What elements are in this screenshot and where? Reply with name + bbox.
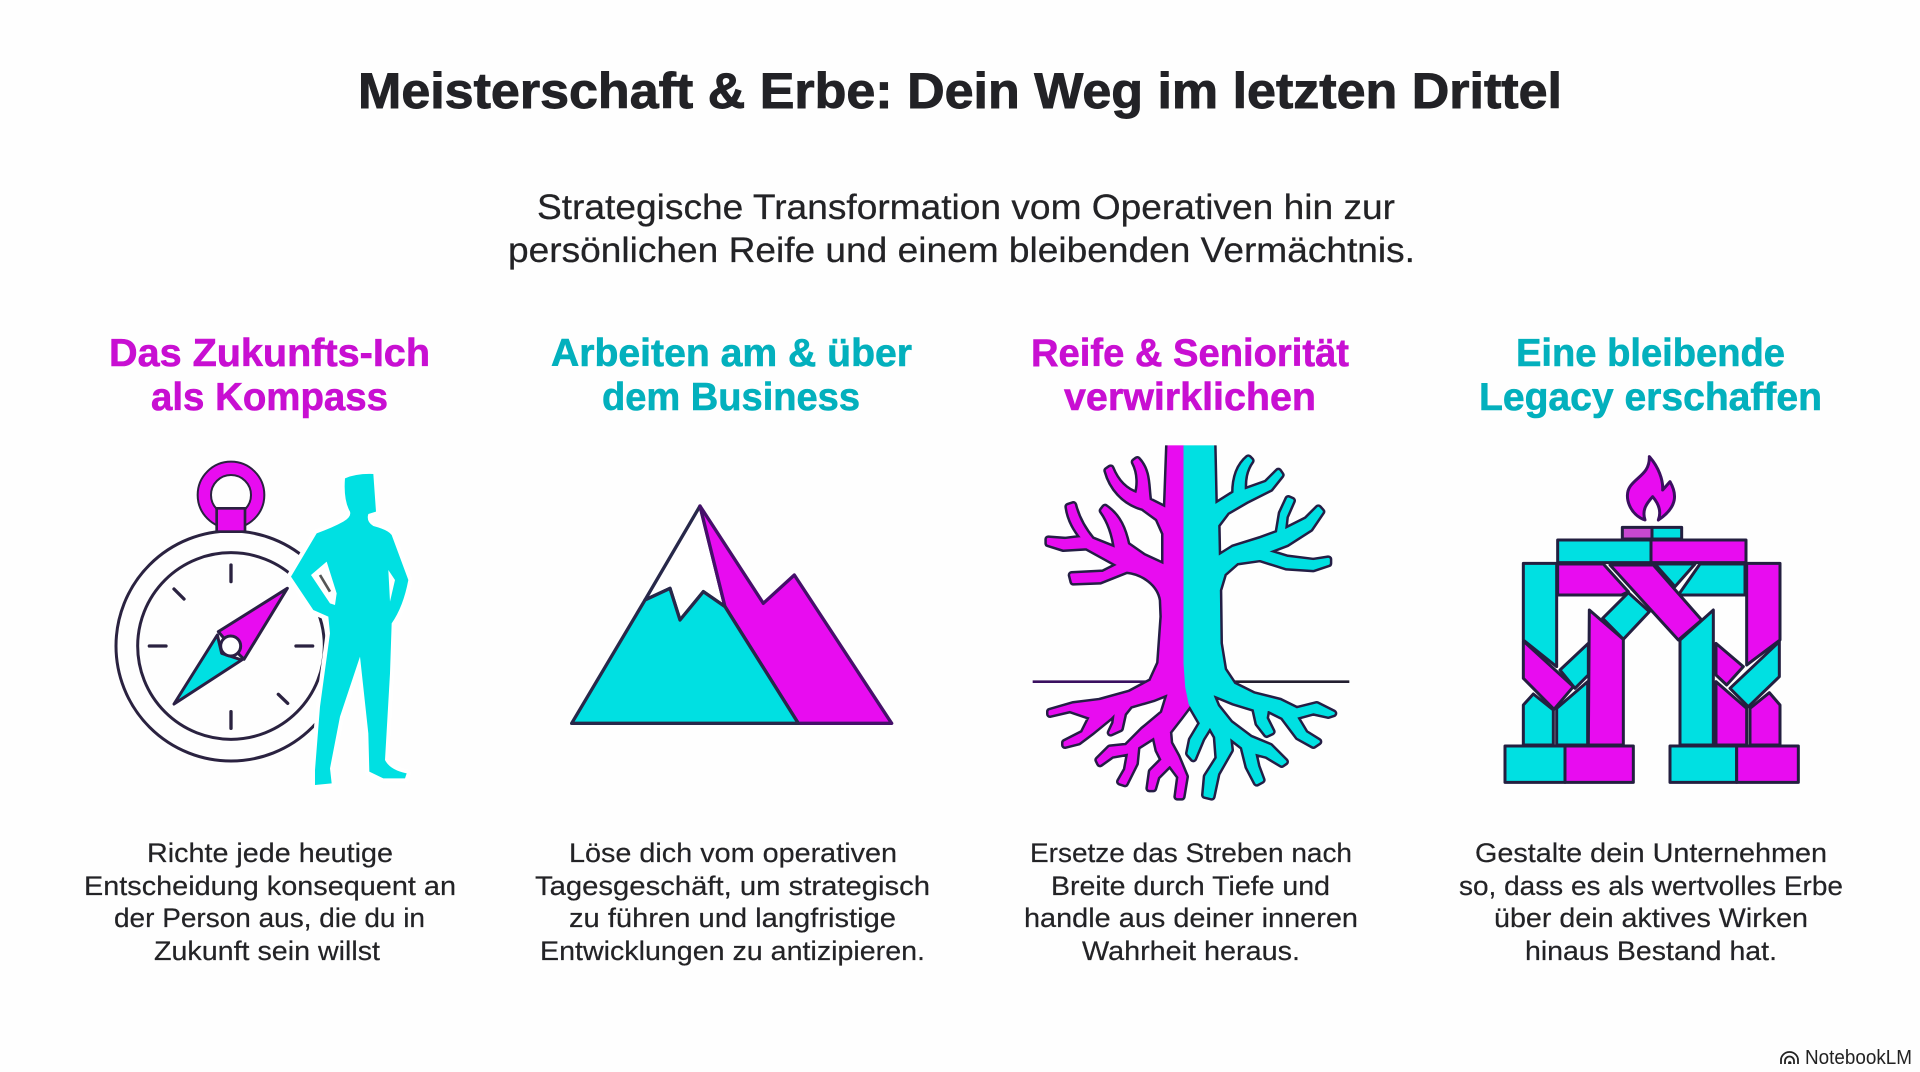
panel: Das Zukunfts-Ich als Kompass	[84, 332, 456, 966]
watermark: NotebookLM: NotebookLM	[1805, 1047, 1912, 1069]
description	[84, 838, 456, 966]
heading: Arbeiten am & über dem Business	[551, 332, 912, 419]
heading: Arbeiten am & über dem Business: Arbeiten am & über	[551, 332, 912, 375]
heading: Das Zukunfts-Ich als Kompass	[109, 332, 430, 419]
description: zu führen und langfristige	[569, 903, 896, 933]
compass needle	[174, 588, 287, 704]
description: Entwicklungen zu antizipieren.	[540, 936, 925, 966]
heading: Reife & Seniorität verwirklichen	[1031, 332, 1349, 419]
person silhouette	[291, 474, 408, 785]
description: Gestalte dein Unternehmen	[1475, 838, 1827, 868]
description: Wahrheit heraus.	[1082, 936, 1300, 966]
heading: Reife & Seniorität verwirklichen: Reife & Seniorität	[1031, 332, 1349, 375]
description: Breite durch Tiefe und	[1051, 871, 1330, 901]
icon: tree with roots	[1033, 438, 1349, 797]
description: Richte jede heutige	[147, 838, 393, 868]
description	[1024, 838, 1358, 966]
description: der Person aus, die du in	[114, 903, 425, 933]
description: hinaus Bestand hat.	[1525, 936, 1777, 966]
description: so, dass es als wertvolles Erbe	[1459, 871, 1843, 901]
description	[535, 838, 930, 966]
subtitle: Strategische Transformation vom Operativen hin zur	[537, 188, 1395, 227]
description: handle aus deiner inneren	[1024, 903, 1358, 933]
compass ring and neck	[204, 468, 258, 532]
magenta peak	[700, 506, 892, 723]
heading: Eine bleibende Legacy erschaffen: Legacy erschaffen	[1479, 376, 1822, 419]
snow cap	[645, 506, 725, 620]
icon: compass and standing person	[116, 468, 408, 785]
heading: Reife & Seniorität verwirklichen: verwirklichen	[1064, 376, 1316, 419]
ground line right	[1230, 678, 1349, 686]
title: Meisterschaft & Erbe: Dein Weg im letzten Drittel	[358, 63, 1562, 119]
heading: Das Zukunfts-Ich als Kompass: Das Zukunfts-Ich	[109, 332, 430, 375]
description	[1459, 838, 1843, 966]
compass body	[116, 531, 346, 761]
heading: Das Zukunfts-Ich als Kompass: als Kompass	[151, 376, 388, 419]
heading: Eine bleibende Legacy erschaffen	[1479, 332, 1822, 419]
panel: Eine bleibende Legacy erschaffen	[1459, 332, 1843, 966]
tree outline	[1048, 446, 1333, 797]
description: Löse dich vom operativen	[569, 838, 897, 868]
arch blocks	[1505, 527, 1798, 782]
ground line	[1033, 678, 1153, 686]
description: Tagesgeschäft, um strategisch	[535, 871, 930, 901]
cyan peak	[572, 588, 798, 723]
panel: Reife & Seniorität verwirklichen	[1024, 332, 1358, 966]
flame	[1627, 457, 1675, 520]
heading: Arbeiten am & über dem Business: dem Business	[602, 376, 860, 419]
description: über dein aktives Wirken	[1494, 903, 1808, 933]
description: Zukunft sein willst	[154, 936, 381, 966]
panel: Arbeiten am & über dem Business	[535, 332, 930, 966]
subtitle	[508, 188, 1415, 270]
icon: mountain	[572, 506, 892, 723]
subtitle: persönlichen Reife und einem bleibenden Vermächtnis.	[508, 231, 1415, 270]
description: Entscheidung konsequent an	[84, 871, 456, 901]
description: Ersetze das Streben nach	[1030, 838, 1352, 868]
icon: woven arch with flame	[1505, 457, 1798, 782]
heading: Eine bleibende Legacy erschaffen: Eine bleibende	[1516, 332, 1785, 375]
tree fill cyan half	[1185, 446, 1333, 797]
icon: NotebookLM arcs	[1781, 1052, 1798, 1064]
tree fill magenta half	[1048, 446, 1190, 797]
